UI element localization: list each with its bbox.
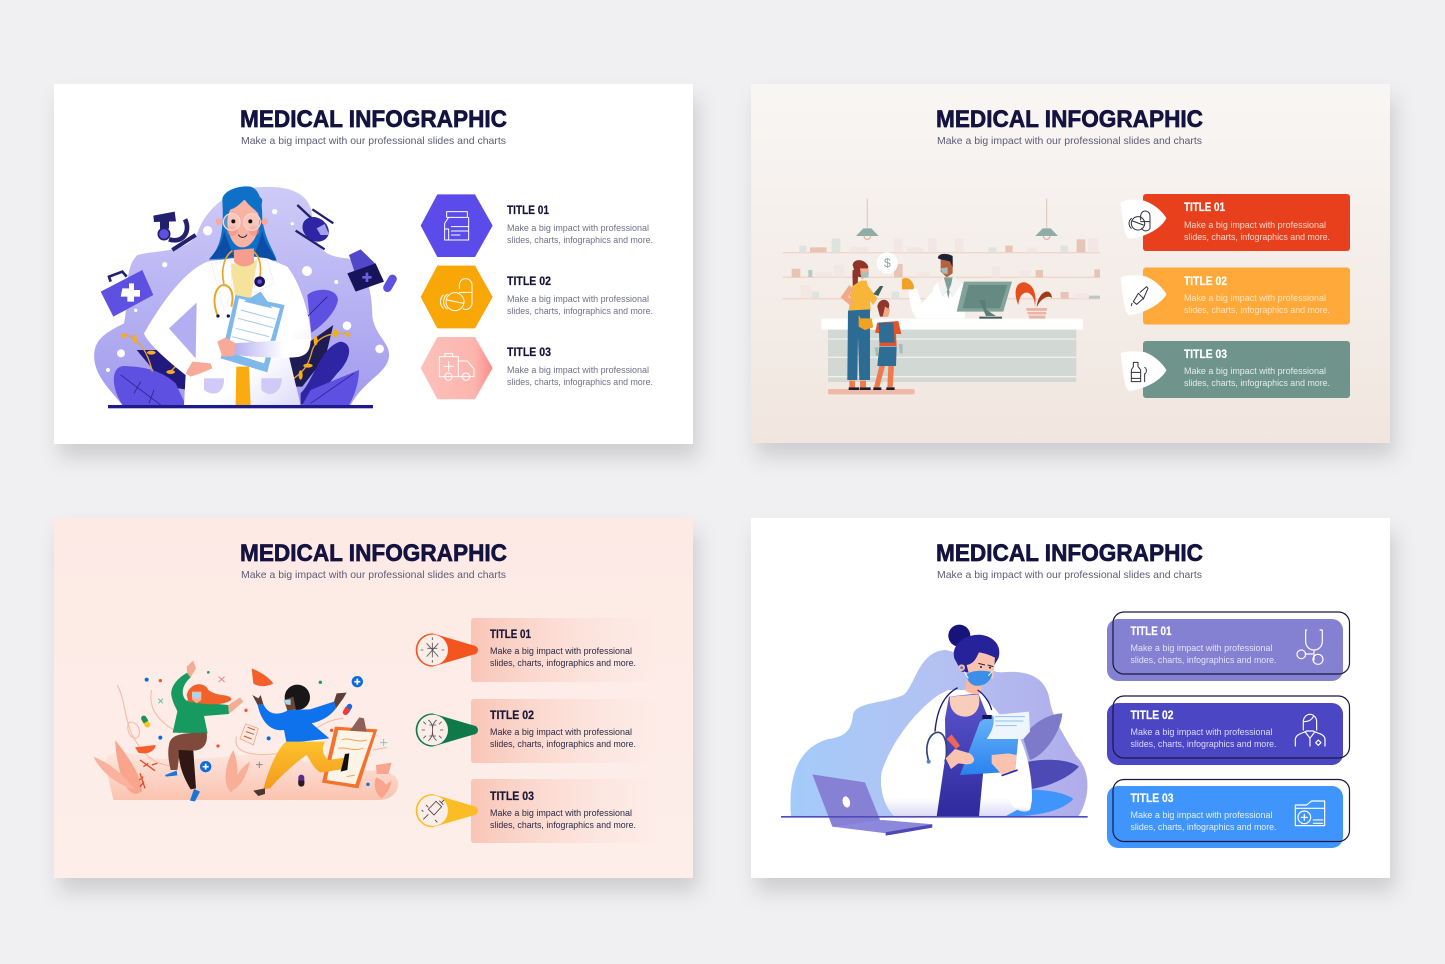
- right dancer: [285, 685, 310, 710]
- hexagon item 2: TITLE 02: [507, 276, 551, 288]
- counter: [828, 329, 1076, 382]
- note: [240, 724, 258, 745]
- panel 1 subtitle: Make a big impact with our professional slides and charts: [241, 135, 506, 147]
- pharmacy item 3: Make a big impact with professional: [1184, 366, 1326, 376]
- left dancer: [171, 673, 229, 733]
- dance item 2: Make a big impact with professional: [490, 727, 632, 737]
- hexagon item 3: [421, 337, 653, 399]
- bordered item 3: slides, charts, infographics and more.: [1130, 822, 1276, 832]
- pharmacy item 1: slides, charts, infographics and more.: [1184, 232, 1330, 242]
- illustration: pharmacy counter: $: [884, 256, 891, 270]
- child: [877, 300, 889, 317]
- bordered item 1: slides, charts, infographics and more.: [1130, 655, 1276, 665]
- illustration: pharmacy counter: [783, 198, 1100, 394]
- pharmacy item 1: [1122, 194, 1350, 251]
- confetti: [145, 678, 370, 786]
- panel 2 background: [751, 84, 1390, 443]
- pharmacy item 2: Make a big impact with professional: [1184, 293, 1326, 303]
- panel 4 background: [751, 518, 1390, 878]
- pharmacy item 3: [1122, 341, 1350, 398]
- panel 3 subtitle: Make a big impact with our professional slides and charts: [241, 569, 506, 581]
- dance item 2: TITLE 02: [490, 710, 534, 722]
- hexagon item 1: slides, charts, infographics and more.: [507, 235, 653, 245]
- bordered item 2: [1107, 696, 1350, 765]
- panel 4 title: MEDICAL INFOGRAPHIC: [936, 540, 1203, 567]
- panel 3 background: [54, 518, 693, 878]
- hexagon item 2: Make a big impact with professional: [507, 294, 649, 304]
- hexagon item 2: [421, 266, 653, 328]
- bordered item 3: Make a big impact with professional: [1130, 810, 1273, 820]
- panel 4 subtitle: Make a big impact with our professional slides and charts: [937, 569, 1202, 581]
- hexagon item 1: [421, 194, 653, 257]
- dance item 2: [416, 699, 655, 763]
- panel 1 title: MEDICAL INFOGRAPHIC: [240, 106, 507, 133]
- pharmacist: [933, 277, 965, 318]
- illustration: doctor with clipboard: [94, 186, 398, 408]
- dance item 3: [416, 779, 655, 843]
- panel: dancing patients slide: [54, 518, 693, 878]
- bordered item 2: Make a big impact with professional: [1130, 727, 1273, 737]
- dance item 3: Make a big impact with professional: [490, 808, 632, 818]
- desk line: [781, 816, 1088, 818]
- hexagon item 3: Make a big impact with professional: [507, 365, 649, 375]
- illustration: dancing people: [93, 661, 398, 801]
- clipboard: [322, 727, 377, 788]
- hexagon item 3: slides, charts, infographics and more.: [507, 377, 653, 387]
- woman: [853, 260, 868, 277]
- pharmacy item 1: TITLE 01: [1184, 202, 1226, 214]
- illustration: doctor with mask and laptop: [781, 625, 1088, 836]
- dance item 1: slides, charts, infographics and more.: [490, 658, 636, 668]
- plant: [1016, 282, 1036, 307]
- pharmacy item 2: slides, charts, infographics and more.: [1184, 305, 1330, 315]
- bordered item 3: [1107, 780, 1350, 848]
- panel 1 background: [54, 84, 693, 444]
- pharmacy item 3: TITLE 03: [1184, 349, 1227, 361]
- panel: pharmacy slide: [751, 84, 1390, 443]
- panel 3 title: MEDICAL INFOGRAPHIC: [240, 540, 507, 567]
- hexagon item 1: TITLE 01: [507, 205, 550, 217]
- bordered item 1: Make a big impact with professional: [1130, 643, 1273, 653]
- panel 2 title: MEDICAL INFOGRAPHIC: [936, 106, 1203, 133]
- bordered item 2: TITLE 02: [1130, 710, 1174, 722]
- dance item 1: Make a big impact with professional: [490, 646, 632, 656]
- pharmacy item 3: slides, charts, infographics and more.: [1184, 378, 1330, 388]
- coin bubble: [877, 252, 898, 274]
- hexagon item 3: TITLE 03: [507, 347, 551, 359]
- dance item 1: [416, 618, 655, 682]
- pharmacy item 2: TITLE 02: [1184, 276, 1227, 288]
- pharmacy item 2: [1122, 268, 1350, 324]
- panel 2 subtitle: Make a big impact with our professional slides and charts: [937, 135, 1202, 147]
- bordered item 2: slides, charts, infographics and more.: [1130, 739, 1276, 749]
- bordered item 1: TITLE 01: [1130, 626, 1172, 638]
- dance item 2: slides, charts, infographics and more.: [490, 739, 636, 749]
- monitor: [957, 282, 1012, 312]
- dance item 3: TITLE 03: [490, 791, 534, 803]
- hexagon item 2: slides, charts, infographics and more.: [507, 306, 653, 316]
- panel: hexagon slide: [54, 84, 693, 444]
- dance item 3: slides, charts, infographics and more.: [490, 820, 636, 830]
- dance item 1: TITLE 01: [490, 629, 532, 641]
- ground line: [108, 405, 373, 408]
- hexagon item 1: Make a big impact with professional: [507, 223, 649, 233]
- bordered item 1: [1107, 612, 1350, 681]
- panel: masked doctor slide: [751, 518, 1390, 878]
- bordered item 3: TITLE 03: [1130, 793, 1174, 805]
- pharmacy item 1: Make a big impact with professional: [1184, 220, 1326, 230]
